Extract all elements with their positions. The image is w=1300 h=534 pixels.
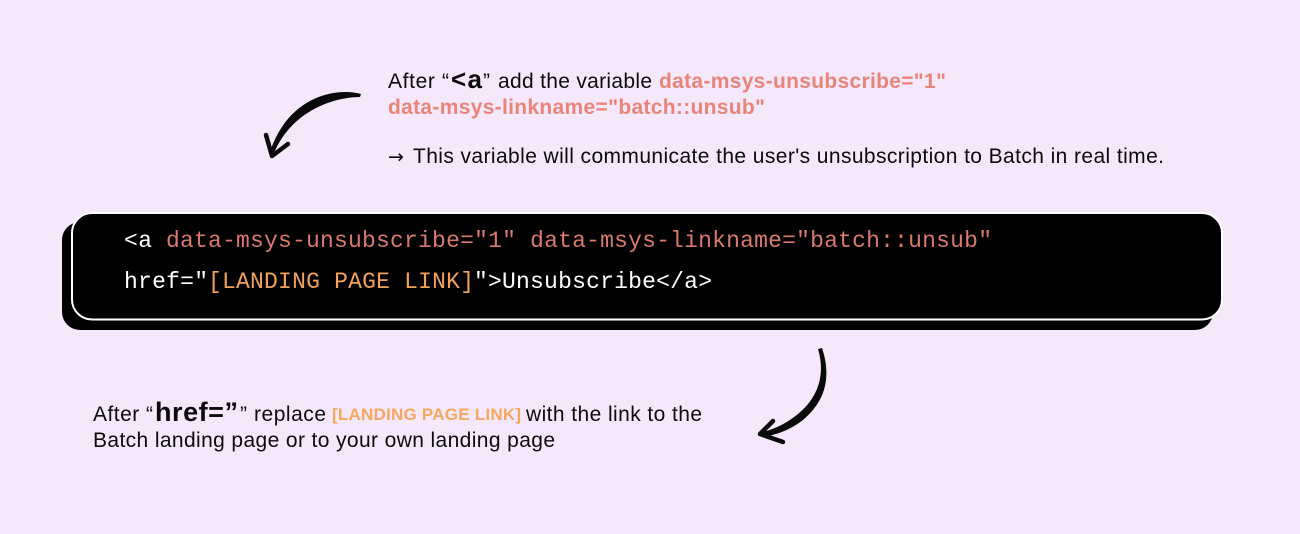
icon: bottom hand-drawn arrow	[760, 348, 826, 442]
annotation: bottom instructions	[93, 397, 702, 452]
text: after a add the variable: ”	[483, 70, 490, 93]
text: after href replace: href=”	[155, 397, 238, 427]
icon: top hand-drawn arrow	[266, 92, 361, 156]
text: after a add the variable: data-msys-unsubscribe="1"	[659, 70, 946, 93]
text: after href replace: replace	[254, 403, 326, 426]
text: after href replace: ”	[240, 403, 247, 426]
text: after a add the variable: add the variable	[498, 70, 652, 93]
text: after href replace: After “	[93, 403, 153, 426]
code line 1: <a	[124, 228, 152, 254]
text: after href replace: [LANDING PAGE LINK]	[332, 405, 521, 424]
code panel body	[72, 213, 1222, 320]
text: after a add the variable: After “	[388, 70, 449, 93]
text: after href replace: with the link to the	[525, 403, 702, 426]
text: batch landing page: Batch landing page or to your own landing page	[93, 429, 555, 452]
text: after href replace	[93, 397, 702, 427]
text: real time communication note: This variable will communicate the user's unsubscription to Batch in real time.	[413, 145, 1164, 168]
code line 2: [LANDING PAGE LINK]	[208, 269, 474, 295]
code line 2: ">Unsubscribe</a>	[474, 269, 712, 295]
annotation: top instructions	[388, 64, 1164, 168]
code line 1: data-msys-unsubscribe="1" data-msys-linkname="batch::unsub"	[166, 228, 992, 254]
code line 2: href="	[124, 269, 208, 295]
code panel	[62, 213, 1222, 330]
code line 2	[124, 269, 712, 295]
text: after a add the variable	[388, 64, 946, 94]
code panel shadow	[62, 222, 1213, 330]
text: linkname variable: data-msys-linkname="batch::unsub"	[388, 96, 765, 119]
text: real time communication note: →	[388, 146, 404, 168]
text: after a add the variable: <a	[451, 64, 483, 94]
